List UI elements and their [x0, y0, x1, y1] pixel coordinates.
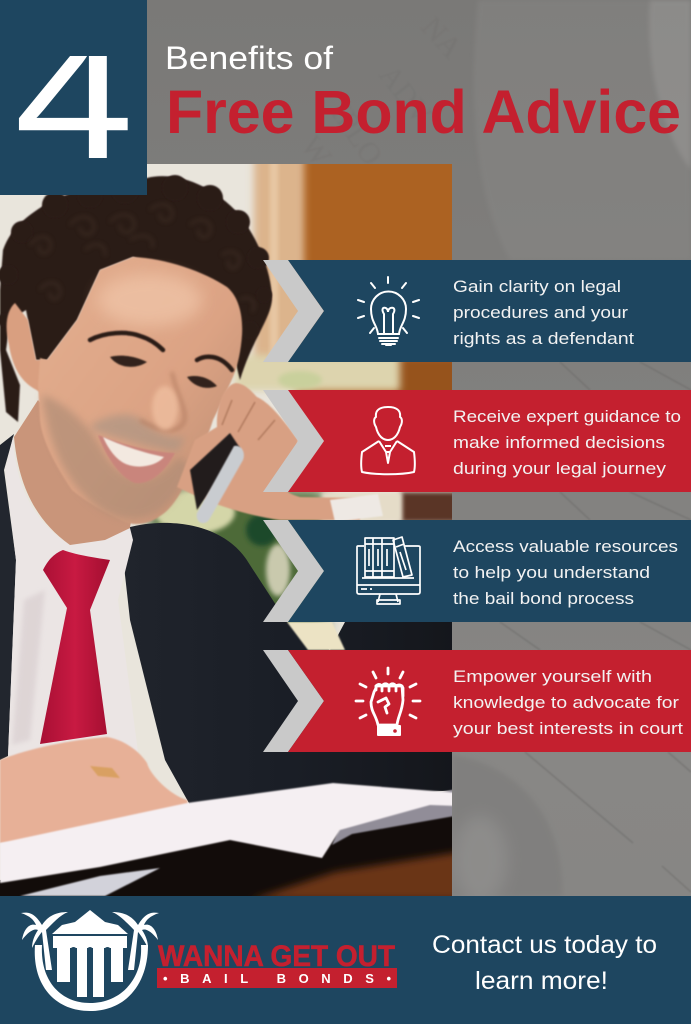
- finger lines: [222, 400, 275, 440]
- ear: [7, 303, 50, 395]
- background: grey document photo: W: [294, 130, 338, 173]
- writing hand: [0, 737, 188, 843]
- text block: Receive expert guidance to: [453, 407, 681, 426]
- contact text: Contact us today to: [432, 931, 657, 959]
- face: [38, 257, 242, 524]
- hair curls: [19, 204, 254, 350]
- benefit 4: empower yourself: [263, 650, 691, 752]
- text block: to help you understand: [453, 563, 650, 582]
- shirt shading: [12, 590, 45, 745]
- text block: [453, 667, 683, 738]
- text block: Empower yourself with: [453, 667, 652, 686]
- text block: knowledge to advocate for: [453, 693, 679, 712]
- text block: your best interests in court: [453, 719, 683, 738]
- stubble shading: [42, 395, 188, 519]
- left lapel: [0, 434, 16, 760]
- background: grey document photo: IPLO: [324, 97, 389, 171]
- neck: [14, 400, 135, 545]
- tie: [40, 550, 110, 744]
- suit jacket: [120, 523, 460, 805]
- text block: [453, 537, 678, 608]
- icon: raised fist: [356, 668, 420, 725]
- logo tagline bar: •BAIL BONDS•: [163, 971, 391, 986]
- nose: [140, 372, 185, 430]
- photo backdrop: wood and wall: [0, 150, 476, 900]
- benefit 3: valuable resources: [263, 520, 691, 622]
- open book: [0, 783, 460, 896]
- hair curl fringe: [0, 175, 272, 339]
- shirt: [5, 437, 138, 756]
- shirt cuff: [330, 494, 383, 522]
- contact text: [432, 931, 657, 995]
- title line 1: Benefits of: [165, 40, 333, 76]
- title line 2: Free Bond Advice: [166, 78, 681, 146]
- pen: [90, 766, 120, 778]
- logo wordmark: WANNA GET OUT: [158, 940, 395, 973]
- table and book shadow: [0, 815, 452, 896]
- logo: courthouse emblem with palms: [21, 910, 159, 1011]
- benefit 1: gain clarity: [263, 260, 691, 362]
- text block: the bail bond process: [453, 589, 634, 608]
- text block: [453, 407, 681, 478]
- big number 4: 4: [14, 0, 134, 196]
- icon: monitor with books: [357, 537, 420, 604]
- text block: Access valuable resources: [453, 537, 678, 556]
- icon: light bulb: [358, 277, 419, 345]
- background: grey document photo: ADV: [372, 59, 439, 131]
- eyes: [110, 356, 217, 388]
- hand holding phone: [177, 383, 360, 520]
- moustache shading: [92, 414, 186, 452]
- cream gap in sleeve: [287, 622, 345, 650]
- text block: Gain clarity on legal: [453, 277, 621, 296]
- mouth: [98, 435, 175, 483]
- photo: smiling man on the phone: [0, 150, 476, 900]
- icon: lawyer: [361, 407, 415, 474]
- footer band: [0, 896, 691, 1024]
- text block: procedures and your: [453, 303, 628, 322]
- text block: make informed decisions: [453, 433, 665, 452]
- text block: rights as a defendant: [453, 329, 634, 348]
- title: [165, 40, 681, 146]
- brows: [90, 333, 232, 370]
- benefit 2: expert guidance: [263, 390, 691, 492]
- contact text: learn more!: [475, 967, 608, 995]
- header square with number 4: [0, 0, 147, 196]
- text block: during your legal journey: [453, 459, 667, 478]
- forehead light: [98, 274, 202, 326]
- background: grey document photo: NA: [415, 11, 469, 65]
- phone: [190, 433, 240, 510]
- text block: [453, 277, 634, 348]
- hair: [0, 176, 272, 422]
